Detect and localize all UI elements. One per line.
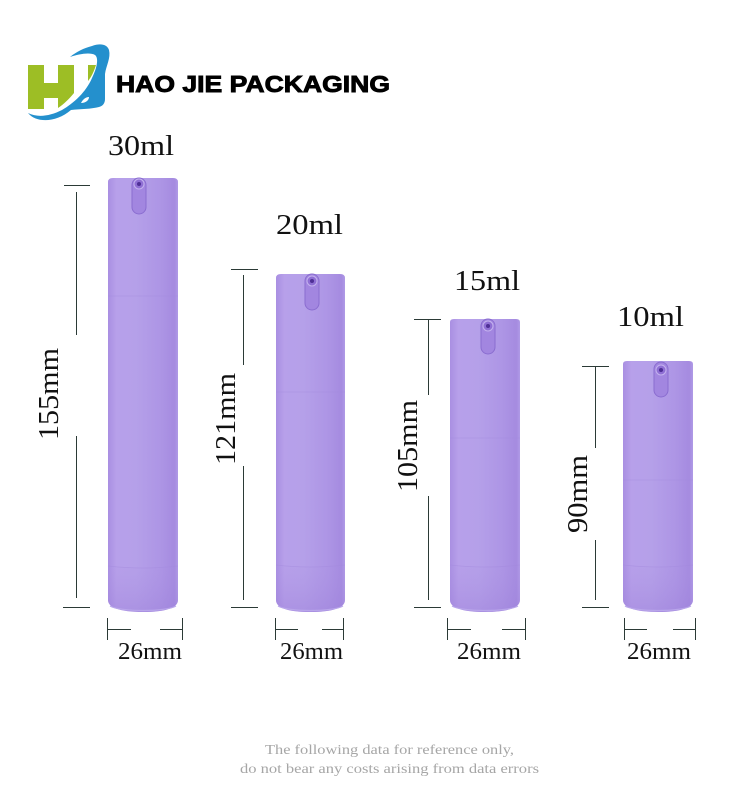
height dimension 121mm: [210, 270, 258, 608]
logo: highlight: [81, 97, 89, 103]
width dimension bottle 20ml: [276, 618, 344, 665]
width dimension bottle 15ml: [448, 618, 526, 665]
disclaimer: [240, 743, 539, 777]
capacity label 30ml: 30ml: [108, 130, 174, 162]
height dimension 90mm: [562, 366, 609, 608]
logo: green letter J stub: [88, 65, 96, 81]
height dimension 105mm: 105mm: [392, 400, 424, 492]
bottle 30ml: [108, 178, 178, 612]
width dimension bottle 30ml: [108, 618, 182, 665]
logo: blue swoosh: [28, 44, 109, 120]
pump slot: [481, 319, 495, 354]
capacity label 10ml: 10ml: [617, 301, 684, 333]
height dimension 155mm: 155mm: [33, 348, 65, 440]
logo: [28, 44, 109, 120]
width dimension bottle 20ml: 26mm: [280, 639, 343, 665]
pump slot: [654, 362, 668, 397]
height dimension 155mm: [33, 186, 90, 608]
disclaimer: The following data for reference only,: [265, 743, 514, 758]
capacity label 15ml: 15ml: [454, 265, 520, 297]
width dimension bottle 10ml: 26mm: [627, 639, 691, 665]
pump slot: [305, 274, 319, 310]
height dimension 121mm: 121mm: [210, 373, 242, 465]
height dimension 90mm: 90mm: [562, 455, 594, 533]
brand name: HAO JIE PACKAGING: [116, 71, 390, 97]
pump slot: [132, 178, 146, 214]
height dimension 105mm: [392, 320, 441, 608]
bottle 10ml: [623, 361, 693, 612]
disclaimer: do not bear any costs arising from data errors: [240, 762, 539, 777]
width dimension bottle 10ml: [624, 618, 696, 665]
bottle 15ml: [450, 319, 520, 612]
logo: green letter H: [28, 65, 74, 109]
capacity label 20ml: 20ml: [276, 209, 343, 241]
bottle 20ml: [276, 274, 345, 612]
width dimension bottle 30ml: 26mm: [118, 639, 182, 665]
width dimension bottle 15ml: 26mm: [457, 639, 521, 665]
